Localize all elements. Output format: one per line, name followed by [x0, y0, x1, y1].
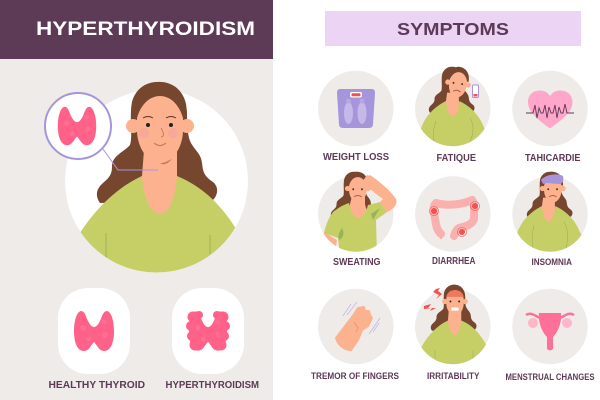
uterus [528, 318, 538, 328]
symptoms heading band [325, 11, 581, 46]
title: HYPERTHYROIDISM [36, 19, 255, 40]
symptom: irritability [415, 284, 490, 364]
label: healthy thyroid: HEALTHY THYROID [48, 379, 145, 391]
label: irritability: IRRITABILITY [427, 371, 480, 382]
sleep mask [541, 174, 563, 184]
symptom: tachycardia [512, 71, 588, 146]
label: weight loss: WEIGHT LOSS [323, 151, 389, 163]
colon [434, 200, 474, 236]
label: tremor of fingers: TREMOR OF FINGERS [311, 371, 399, 381]
symptom: diarrhea [415, 176, 490, 252]
icon: low battery [472, 85, 478, 98]
label: tahicardie: TAHICARDIE [525, 153, 581, 164]
symptom: tremor of fingers [318, 289, 393, 364]
raised arm [364, 175, 397, 212]
header band [0, 0, 273, 59]
label: diarrhea: DIARRHEA [432, 256, 476, 267]
symptom: fatigue [415, 66, 490, 146]
white backdrop circle [65, 90, 248, 272]
symptom: sweating [318, 172, 397, 256]
card: hyperthyroidism [172, 288, 244, 374]
symptom: menstrual changes [512, 289, 588, 364]
callout: thyroid magnifier [45, 93, 158, 170]
symptom: insomnia [512, 172, 588, 252]
hand [336, 307, 372, 350]
label: sweating: SWEATING [333, 257, 381, 268]
anger sparks [424, 288, 442, 311]
label: fatigue: FATIQUE [436, 153, 476, 164]
main woman illustration [65, 82, 248, 272]
label: hyperthyroidism: HYPERTHYROIDISM [166, 380, 259, 391]
left panel background [0, 59, 273, 400]
symptom: weight loss [318, 71, 393, 146]
card: healthy thyroid [58, 288, 130, 374]
symptoms heading: SYMPTOMS [397, 19, 509, 39]
label: insomnia: INSOMNIA [532, 257, 572, 268]
